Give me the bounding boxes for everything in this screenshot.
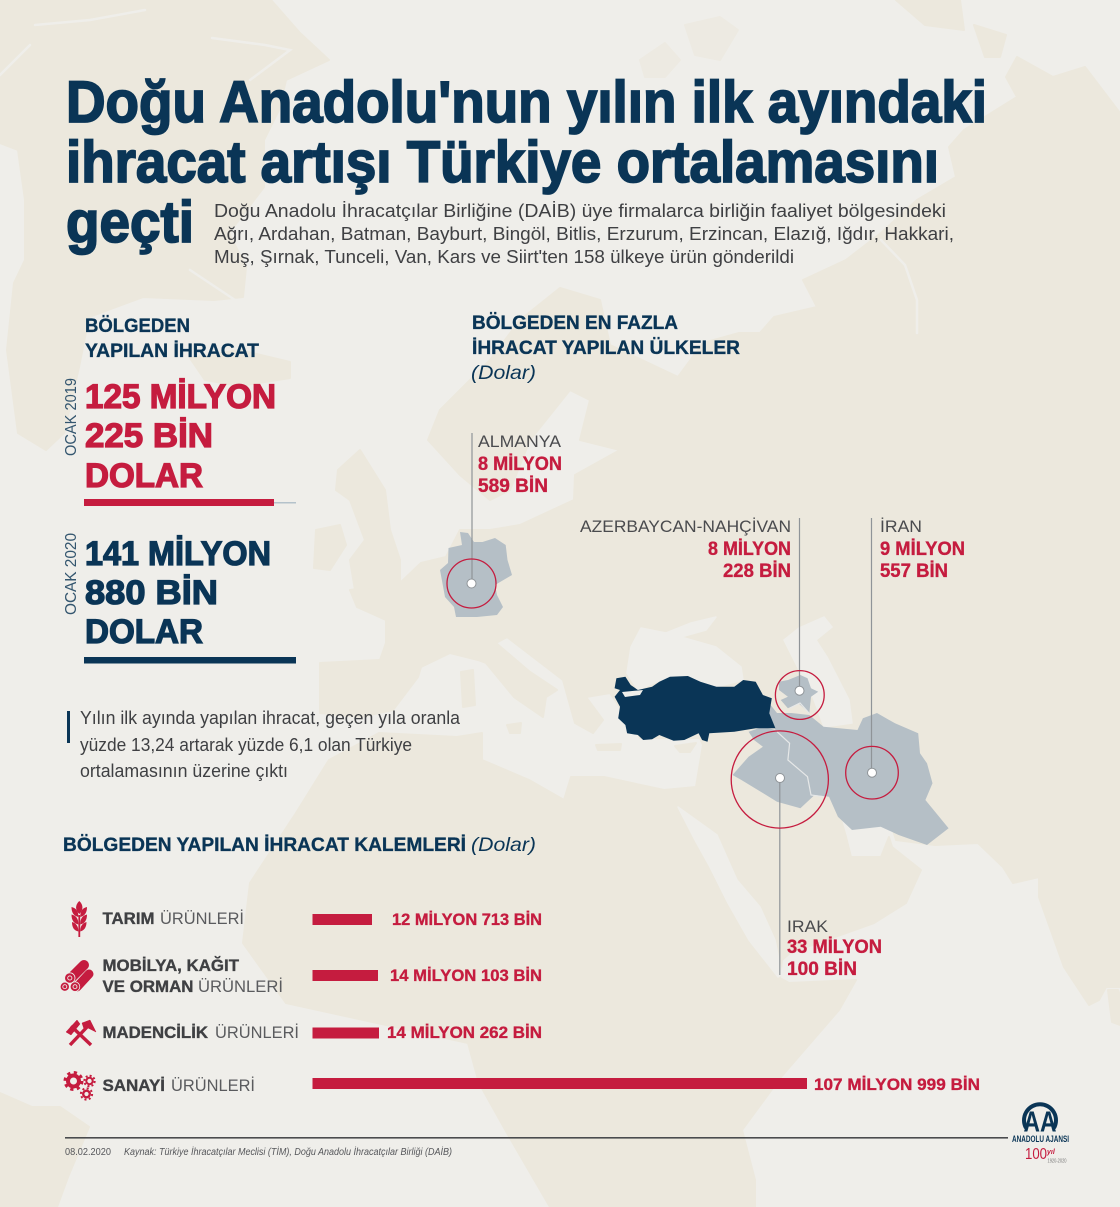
value: January 2019: 125 MİLYON [85,378,276,416]
footer: date and source: Kaynak: Türkiye İhracatçılar Meclisi (TİM), Doğu Anadolu İhracatçılar Birliği (DAİB) [124,1146,452,1158]
map: Turkey [615,676,775,742]
bar: January 2020 [84,657,296,664]
label: Iraq: 33 MİLYON [787,937,882,958]
label: industry [102,1076,255,1095]
label: Iran: 557 BİN [880,561,948,582]
icon: wheat [72,901,87,937]
heading: top export countries: BÖLGEDEN EN FAZLA [472,313,678,334]
label: Germany: ALMANYA [478,432,562,451]
label: Iran [880,517,965,582]
label: furniture, paper and forestry: ÜRÜNLERİ [198,977,283,996]
map: Azerbaijan [779,675,818,713]
logo: Anadolu Ajansı: ANADOLU AJANSI [1012,1134,1069,1144]
map: Germany [440,532,512,617]
bar: mining [312,1028,379,1038]
icon: logs [60,965,89,992]
marker: Iran [846,518,898,799]
value: agriculture: 12 MİLYON 713 BİN [392,910,542,929]
label: mining: ÜRÜNLERİ [215,1023,299,1042]
title: geçti [66,190,194,255]
heading: top export countries [471,313,740,384]
bar: January 2019 [84,499,296,506]
heading: regional exports [85,316,259,362]
marker: Germany [447,433,496,608]
bar: furniture, paper and forestry [312,970,378,981]
title: Doğu Anadolu'nun yılın ilk ayındaki [66,70,987,135]
value: industry: 107 MİLYON 999 BİN [814,1075,980,1094]
label: Iraq: IRAK [787,917,829,936]
label: agriculture [102,909,244,928]
label: Azerbaijan-Nakhchivan [580,517,791,582]
label: Germany: 8 MİLYON [478,454,562,475]
bar: agriculture [312,914,372,925]
label: Germany: 589 BİN [478,476,548,497]
title [66,70,987,255]
heading: top export countries: (Dolar) [471,363,536,384]
heading: regional exports: YAPILAN İHRACAT [85,341,259,362]
label: furniture, paper and forestry [102,956,283,996]
value: January 2019 [85,378,276,495]
label: agriculture: TARIM [102,909,154,928]
callout: growth note: yüzde 13,24 artarak yüzde 6,1 olan Türkiye [80,735,412,755]
logo: Anadolu Ajansı: yıl [1046,1149,1056,1156]
icon: gears [65,1072,95,1100]
footer: date and source: 08.02.2020 [65,1147,111,1158]
subtitle: Doğu Anadolu İhracatçılar Birliğine (DAİB) üye firmalarca birliğin faaliyet bölgesindeki [214,201,946,221]
label: industry: SANAYİ [102,1076,165,1095]
callout: growth note: ortalamasının üzerine çıktı [80,761,288,781]
value: mining: 14 MİLYON 262 BİN [387,1023,542,1042]
value: January 2020: 141 MİLYON [85,535,271,573]
label: Ocak 2020: OCAK 2020 [63,533,80,615]
label: Germany [478,432,562,497]
row: industry [65,1072,980,1100]
label: Iraq: 100 BİN [787,959,857,980]
value: January 2020: 880 BİN [85,574,218,612]
map: destination countries [440,532,949,845]
label: mining: MADENCİLİK [102,1023,209,1042]
footer: date and source [65,1137,1008,1158]
marker: Iraq [731,731,828,975]
subtitle: Muş, Şırnak, Tunceli, Van, Kars ve Siirt'ten 158 ülkeye ürün gönderildi [214,247,794,267]
label: Azerbaijan-Nakhchivan: 228 BİN [723,561,791,582]
heading: export items: (Dolar) [471,835,536,856]
value: January 2020: DOLAR [85,613,203,651]
row: mining [66,1020,542,1045]
value: furniture, paper and forestry: 14 MİLYON 103 BİN [390,966,542,985]
label: agriculture: ÜRÜNLERİ [160,909,244,928]
label: Ocak 2019: OCAK 2019 [63,378,80,456]
logo: Anadolu Ajansı: 1920-2020 [1048,1158,1067,1164]
label: furniture, paper and forestry: VE ORMAN [102,977,194,996]
icon: crossed hammers [66,1020,96,1045]
panel: regional exports [63,316,296,664]
map: Iran and Iraq [732,702,949,845]
value: January 2019: DOLAR [85,457,203,495]
callout: growth note: Yılın ilk ayında yapılan ihracat, geçen yıla oranla [80,708,461,728]
subtitle: Ağrı, Ardahan, Batman, Bayburt, Bingöl, Bitlis, Erzurum, Erzincan, Elazığ, Iğdır, Hakkari, [214,224,954,244]
title: ihracat artışı Türkiye ortalamasını [66,130,939,195]
label: industry: ÜRÜNLERİ [171,1076,255,1095]
label: Azerbaijan-Nakhchivan: 8 MİLYON [708,539,791,560]
bar: industry [312,1078,807,1089]
label: mining [102,1023,299,1042]
heading: regional exports: BÖLGEDEN [85,316,190,337]
label: Iran: 9 MİLYON [880,539,965,560]
logo: Anadolu Ajansı: AA [1024,1106,1057,1138]
logo: Anadolu Ajansı [1012,1104,1069,1164]
subtitle [214,201,954,267]
value: January 2019: 225 BİN [85,417,213,455]
callout: growth note [67,708,461,781]
logo: Anadolu Ajansı: 100 [1025,1146,1047,1163]
row: furniture, paper and forestry [60,956,542,996]
label: furniture, paper and forestry: MOBİLYA, KAĞIT [102,956,240,975]
row: agriculture [72,901,542,937]
label: Azerbaijan-Nakhchivan: AZERBAYCAN-NAHÇİVAN [580,517,791,536]
heading: export items: BÖLGEDEN YAPILAN İHRACAT KALEMLERİ [63,835,466,856]
label: Iran: İRAN [880,517,922,536]
value: January 2020 [85,535,271,651]
label: Iraq [787,917,882,980]
heading: top export countries: İHRACAT YAPILAN ÜLKELER [472,338,740,359]
marker: Azerbaijan-Nakhchivan [775,518,824,719]
